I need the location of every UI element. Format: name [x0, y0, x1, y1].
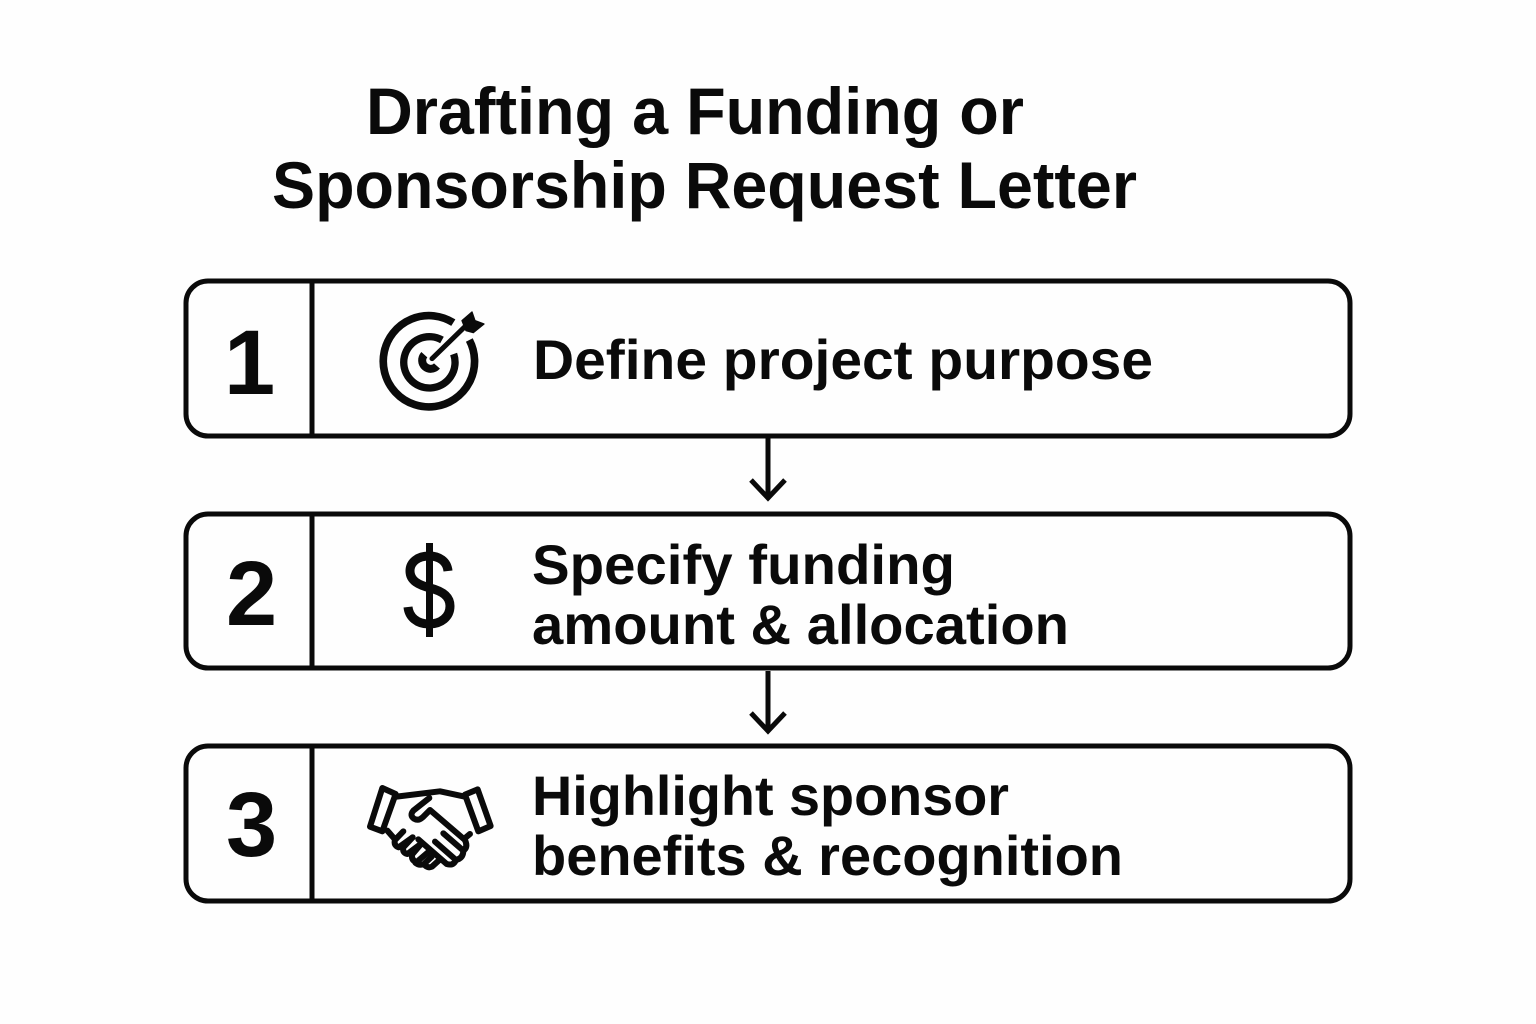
panel: step 1: [186, 281, 1350, 436]
step 2 label: Specify funding: [532, 533, 955, 596]
step 2 box: [186, 514, 1350, 668]
title: Sponsorship Request Letter: [272, 148, 1137, 222]
title: [272, 74, 1137, 222]
panel: step 3: [186, 746, 1350, 901]
step 1 box: [186, 281, 1350, 436]
step 1 label: Define project purpose: [533, 328, 1153, 391]
step 3 label: benefits & recognition: [532, 824, 1123, 887]
icon: target with arrow: [383, 312, 484, 407]
step 2 label: [532, 533, 1069, 656]
panel: step 2: [186, 514, 1350, 668]
step 1 number: 1: [224, 312, 275, 414]
icon: dollar sign: [408, 543, 450, 637]
step 2 number: 2: [226, 543, 277, 645]
icon: handshake: [370, 788, 491, 867]
arrow: step 2 to step 3: [751, 671, 785, 731]
step 3 number: 3: [226, 774, 277, 876]
title: Drafting a Funding or: [366, 74, 1024, 148]
arrow: step 1 to step 2: [751, 438, 785, 498]
step 3 label: Highlight sponsor: [532, 764, 1009, 827]
step 2 label: amount & allocation: [532, 593, 1069, 656]
step 3 label: [532, 764, 1123, 887]
step 3 box: [186, 746, 1350, 901]
